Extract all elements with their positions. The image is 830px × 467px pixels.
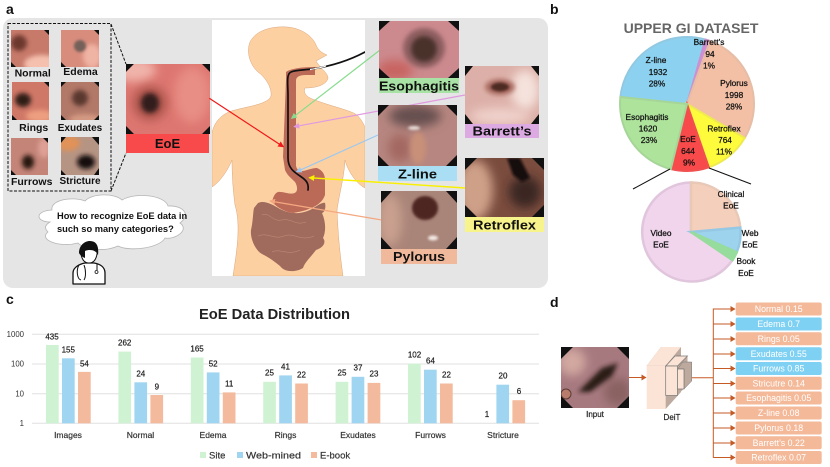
input image (558, 347, 632, 419)
esophagus and stomach (272, 67, 325, 213)
Pylorus image and label (378, 191, 457, 264)
pie labels: 644 (681, 146, 695, 156)
thumbnail: Stricture: Stricture (59, 176, 101, 187)
slice: Z-line (620, 37, 706, 104)
slice: Book EoE (691, 232, 737, 260)
pie labels: 28% (649, 78, 666, 88)
category labels: Stricture (487, 430, 519, 440)
value labels: 41 (281, 362, 290, 372)
value labels: 6 (517, 387, 522, 396)
main pie chart (620, 37, 754, 171)
DeiT model blocks (647, 347, 692, 422)
output class list: Retroflex 0.07 (751, 452, 806, 462)
secondary pie labels: EoE (742, 240, 758, 250)
pie labels: 1% (703, 60, 716, 70)
Z-line image and label (378, 105, 457, 182)
output class list (736, 302, 822, 464)
value labels: 25 (265, 368, 274, 378)
arrow: Retroflex (309, 178, 465, 188)
panel a: background (3, 18, 548, 288)
secondary pie labels: Web (742, 228, 759, 238)
pie labels: EoE (680, 134, 696, 144)
arrow: Barrett's (294, 95, 465, 127)
value labels: 24 (136, 370, 146, 378)
output class list: Rings 0.05 (758, 334, 800, 344)
y axis labels: 10 (15, 389, 25, 398)
Barrett's image and label (465, 66, 539, 138)
arrow: Esophagitis (292, 50, 380, 118)
Retroflex image and label (465, 158, 544, 232)
Barrett's image and label: Barrett’s (472, 124, 532, 138)
value labels: 20 (499, 372, 508, 380)
secondary pie labels: EoE (653, 240, 669, 250)
category labels: Exudates (340, 430, 376, 440)
Z-line image and label: Z-line (398, 167, 437, 182)
value labels: 155 (62, 346, 76, 354)
panel letter b: b (550, 1, 559, 17)
thought cloud with question: such so many categories? (57, 224, 174, 234)
thumbnail: Edema: Edema (63, 66, 98, 78)
thumbnail: Stricture (60, 137, 100, 184)
output class list: Stricutre 0.14 (753, 378, 805, 388)
pie labels: Esophagitis (626, 112, 668, 122)
slice: Esophagitis (620, 97, 687, 169)
panel letter d: d (550, 294, 559, 310)
bar chart legend: E-book (320, 450, 350, 462)
EoE sub-category group (8, 24, 126, 191)
pie labels: 1932 (649, 67, 668, 77)
thought cloud with question (39, 195, 187, 250)
panel letter a: a (6, 1, 14, 17)
value labels: 1 (485, 410, 490, 419)
value labels: 11 (225, 380, 234, 388)
arrow: input to model (629, 376, 646, 378)
output class list: Edema 0.7 (757, 319, 800, 329)
slice: Clinical EoE (691, 182, 740, 232)
thumbnail: Furrows (11, 138, 53, 188)
slice: Video EoE (642, 182, 732, 281)
value labels: 23 (370, 370, 379, 378)
value labels: 25 (338, 368, 347, 378)
thumbnail: Edema (61, 30, 99, 75)
EoE main image with label (126, 64, 210, 153)
category labels: Rings (275, 430, 296, 440)
thumbnail: Rings (12, 82, 49, 133)
branching output connectors (692, 308, 735, 458)
pie chart title: UPPER GI DATASET (624, 20, 759, 36)
input image: Input (586, 410, 605, 419)
Retroflex image and label: Retroflex (473, 218, 537, 233)
EoE main image with label: EoE (155, 136, 180, 151)
zoom lines from EoE slice (633, 168, 751, 189)
y axis labels: 1 (20, 419, 24, 428)
output class list: Exudates 0.55 (751, 349, 807, 359)
bar chart legend (200, 450, 350, 462)
value labels: 165 (190, 344, 204, 354)
pie labels: Z-line (646, 55, 667, 65)
pie labels: 1998 (725, 90, 744, 100)
secondary pie chart (642, 182, 741, 281)
pie labels: 9% (683, 158, 696, 168)
pie labels (626, 37, 748, 168)
Site bars (46, 345, 421, 423)
slice: Barrett's (687, 40, 710, 104)
thought cloud with question: How to recognize EoE data in (57, 211, 187, 221)
output class list: Z-line 0.08 (758, 408, 800, 418)
arrow: Pylorus (270, 201, 382, 220)
arrow: Z-line (297, 135, 378, 172)
pie labels: Barrett’s (694, 37, 724, 47)
pie labels: Pylorus (720, 78, 748, 88)
value labels (45, 332, 522, 419)
value labels: 64 (426, 356, 435, 366)
category labels (54, 430, 519, 440)
secondary pie labels: EoE (738, 268, 754, 278)
category labels: Furrows (415, 430, 446, 440)
slice: Web EoE (691, 228, 741, 252)
value labels: 435 (45, 332, 59, 342)
arrow: EoE to esophagus (209, 98, 283, 147)
thumbnail: Normal (11, 30, 50, 76)
body illustration (212, 20, 365, 276)
value labels: 22 (297, 370, 306, 380)
category labels: Edema (200, 430, 227, 440)
bar chart legend: Site (209, 450, 225, 462)
Pylorus image and label: Pylorus (393, 249, 445, 264)
thumbnail: Rings: Rings (19, 122, 48, 134)
secondary pie labels: Clinical (718, 189, 745, 199)
value labels: 262 (118, 338, 132, 348)
zoom guide lines (111, 24, 126, 191)
value labels: 52 (209, 360, 218, 368)
y axis labels (7, 330, 25, 428)
category labels: Normal (127, 430, 154, 440)
output class list: Furrows 0.85 (753, 364, 804, 374)
pie labels: 94 (705, 49, 715, 59)
pie labels: 11% (716, 146, 733, 156)
slice: EoE (671, 104, 709, 171)
pie labels: Retroflex (707, 124, 741, 134)
secondary pie labels (650, 189, 759, 278)
panel letter c: c (6, 291, 14, 307)
value labels: 54 (80, 360, 89, 368)
dashed box (8, 24, 111, 191)
thumbnail: Normal: Normal (15, 68, 51, 80)
output class list: Normal 0.15 (755, 304, 803, 314)
category labels: Images (54, 430, 82, 440)
pie labels: 28% (726, 102, 743, 112)
Esophagitis image and label: Esophagitis (379, 79, 459, 94)
secondary pie labels: Book (737, 256, 756, 266)
thumbnail: Exudates (58, 82, 103, 134)
Esophagitis image and label (377, 21, 459, 94)
y axis labels: 1000 (7, 330, 25, 339)
bar chart (7, 330, 539, 440)
bar chart legend: Web-mined (246, 450, 301, 462)
value labels: 102 (408, 350, 422, 360)
output class list: Esophagitis 0.05 (746, 393, 811, 403)
value labels: 22 (442, 370, 451, 380)
scope inside body (288, 52, 365, 190)
pie labels: 23% (641, 135, 658, 145)
intestines (251, 202, 325, 271)
Web-mined bars (62, 358, 509, 423)
output class list: Barrett’s 0.22 (753, 438, 805, 448)
pie labels: 1620 (639, 124, 658, 134)
thumbnail: Furrows: Furrows (11, 176, 53, 188)
slice: Retroflex (687, 104, 745, 167)
bar chart title: EoE Data Distribution (199, 307, 350, 323)
value labels: 9 (155, 382, 160, 392)
pie labels: 764 (718, 135, 732, 145)
thumbnail: Exudates: Exudates (58, 123, 103, 134)
y axis labels: 100 (11, 360, 25, 369)
slice: Pylorus (687, 41, 754, 138)
value labels: 37 (354, 364, 363, 372)
DeiT model blocks: DeiT (664, 413, 681, 422)
secondary pie labels: Video (650, 228, 672, 238)
secondary pie labels: EoE (723, 200, 739, 210)
body silhouette (212, 27, 365, 276)
E-book bars (78, 372, 525, 423)
icon: doctor (73, 241, 105, 284)
output class list: Pylorus 0.18 (754, 423, 803, 433)
